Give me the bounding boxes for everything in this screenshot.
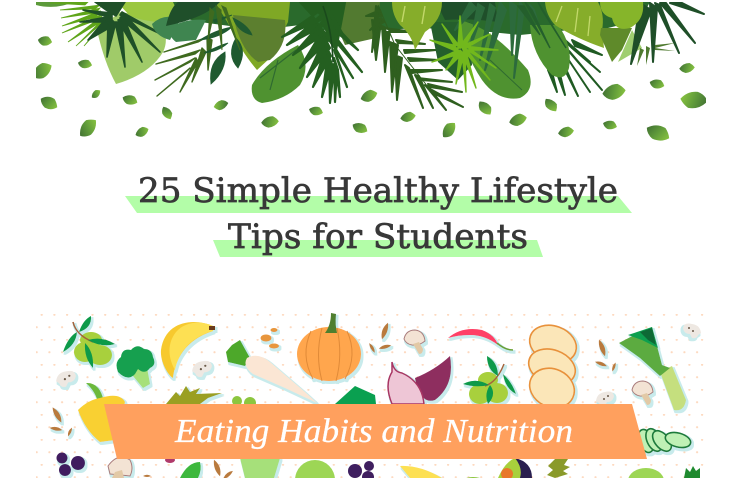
icon: red onion [388, 356, 451, 404]
palm: right dark fan [631, 2, 704, 64]
icon: mushroom top [404, 330, 425, 354]
foliage border [36, 2, 704, 110]
palm: dark overlay [518, 2, 566, 48]
icon: mushroom right [632, 381, 653, 405]
icon: broccoli [117, 346, 154, 388]
icon: peas [232, 396, 256, 409]
icon: cucumbers [635, 426, 692, 455]
leaf: lime big right [545, 2, 604, 48]
icon: berries left [56, 452, 85, 476]
icon: bread slices [523, 319, 582, 415]
icon: olives right [463, 356, 516, 404]
icon: red onion fragment [165, 457, 175, 463]
palm: right lower [548, 40, 602, 96]
icon: herb sprig [166, 386, 222, 404]
leaf: top-left sliver [36, 2, 74, 7]
icon: mushroom centre [192, 361, 212, 377]
icon: almonds right [594, 339, 617, 372]
icon: avocado and eggplant [498, 458, 532, 478]
leaf: medium green lower [458, 20, 531, 99]
leaves: dark centre [200, 15, 252, 84]
icon: mushroom small left [56, 371, 76, 387]
title highlight line 2 [213, 240, 543, 257]
leaf: dark top [166, 2, 220, 26]
leaf: olive back right [337, 2, 380, 45]
icon: fern bottom [547, 459, 570, 478]
palm: lime star [430, 16, 498, 92]
icon: cabbage left [295, 460, 335, 478]
palm: left lime fan [50, 2, 106, 46]
icon: leek [619, 327, 686, 410]
banner text: Eating Habits and Nutrition [174, 413, 573, 450]
title line 1: 25 Simple Healthy Lifestyle [138, 171, 618, 211]
palm: dark strands middle [455, 2, 546, 78]
icon: parsnip [226, 340, 317, 403]
icon: corn [78, 383, 125, 442]
icon: mushroom under banner [596, 392, 614, 406]
icon: almonds bottom [143, 459, 234, 478]
palm: far-centre stem [366, 6, 463, 110]
icon: almonds left [49, 406, 73, 437]
leaf: olive dark [233, 15, 285, 62]
leaf: large green [252, 45, 306, 103]
icon: seeds [260, 328, 279, 348]
icon: leek tips [335, 386, 376, 404]
dotted background [36, 312, 706, 478]
leaf: dark top right of centre [440, 2, 496, 22]
icon: banana [161, 322, 215, 378]
palm: big dark [282, 2, 362, 103]
icon: lettuce stalk [240, 458, 280, 478]
icon: almonds middle [368, 322, 392, 354]
leaf: top lime band [122, 2, 174, 22]
foliage: top backdrop [155, 2, 650, 35]
title line 2: Tips for Students [228, 217, 528, 257]
leaf: lime heart [392, 2, 442, 50]
icon: chili [448, 329, 513, 350]
icon: pumpkin [297, 313, 361, 381]
icon: mushroom bottom [108, 457, 132, 478]
title [125, 171, 632, 257]
scattered small leaves [29, 35, 708, 145]
fern: centre left [155, 38, 212, 96]
icon: parsley [684, 466, 700, 478]
banner: Eating Habits and Nutrition [104, 404, 647, 459]
panel: food illustration [36, 312, 706, 478]
leaves: medium green cluster [152, 17, 206, 42]
icon: cabbage right [628, 468, 664, 478]
icon: mushroom far right [683, 324, 701, 338]
icon: lime bottom [464, 477, 482, 478]
icon: green leaf bottom [180, 462, 201, 478]
foliage: dark mass under lime star [430, 22, 472, 80]
title highlight line 1 [125, 196, 632, 213]
leaf: left light leaf [97, 12, 166, 84]
icon: olives left [63, 316, 115, 368]
leaves: lime rounds [600, 2, 643, 29]
palm: left dark fan [80, 2, 167, 67]
fern: right [600, 28, 632, 62]
leaf: olive top [215, 2, 290, 70]
palm: centre stalks [208, 6, 240, 50]
icon: banana bottom [400, 466, 442, 478]
icon: berries bottom [348, 461, 374, 478]
leaf: green drop [530, 25, 570, 77]
